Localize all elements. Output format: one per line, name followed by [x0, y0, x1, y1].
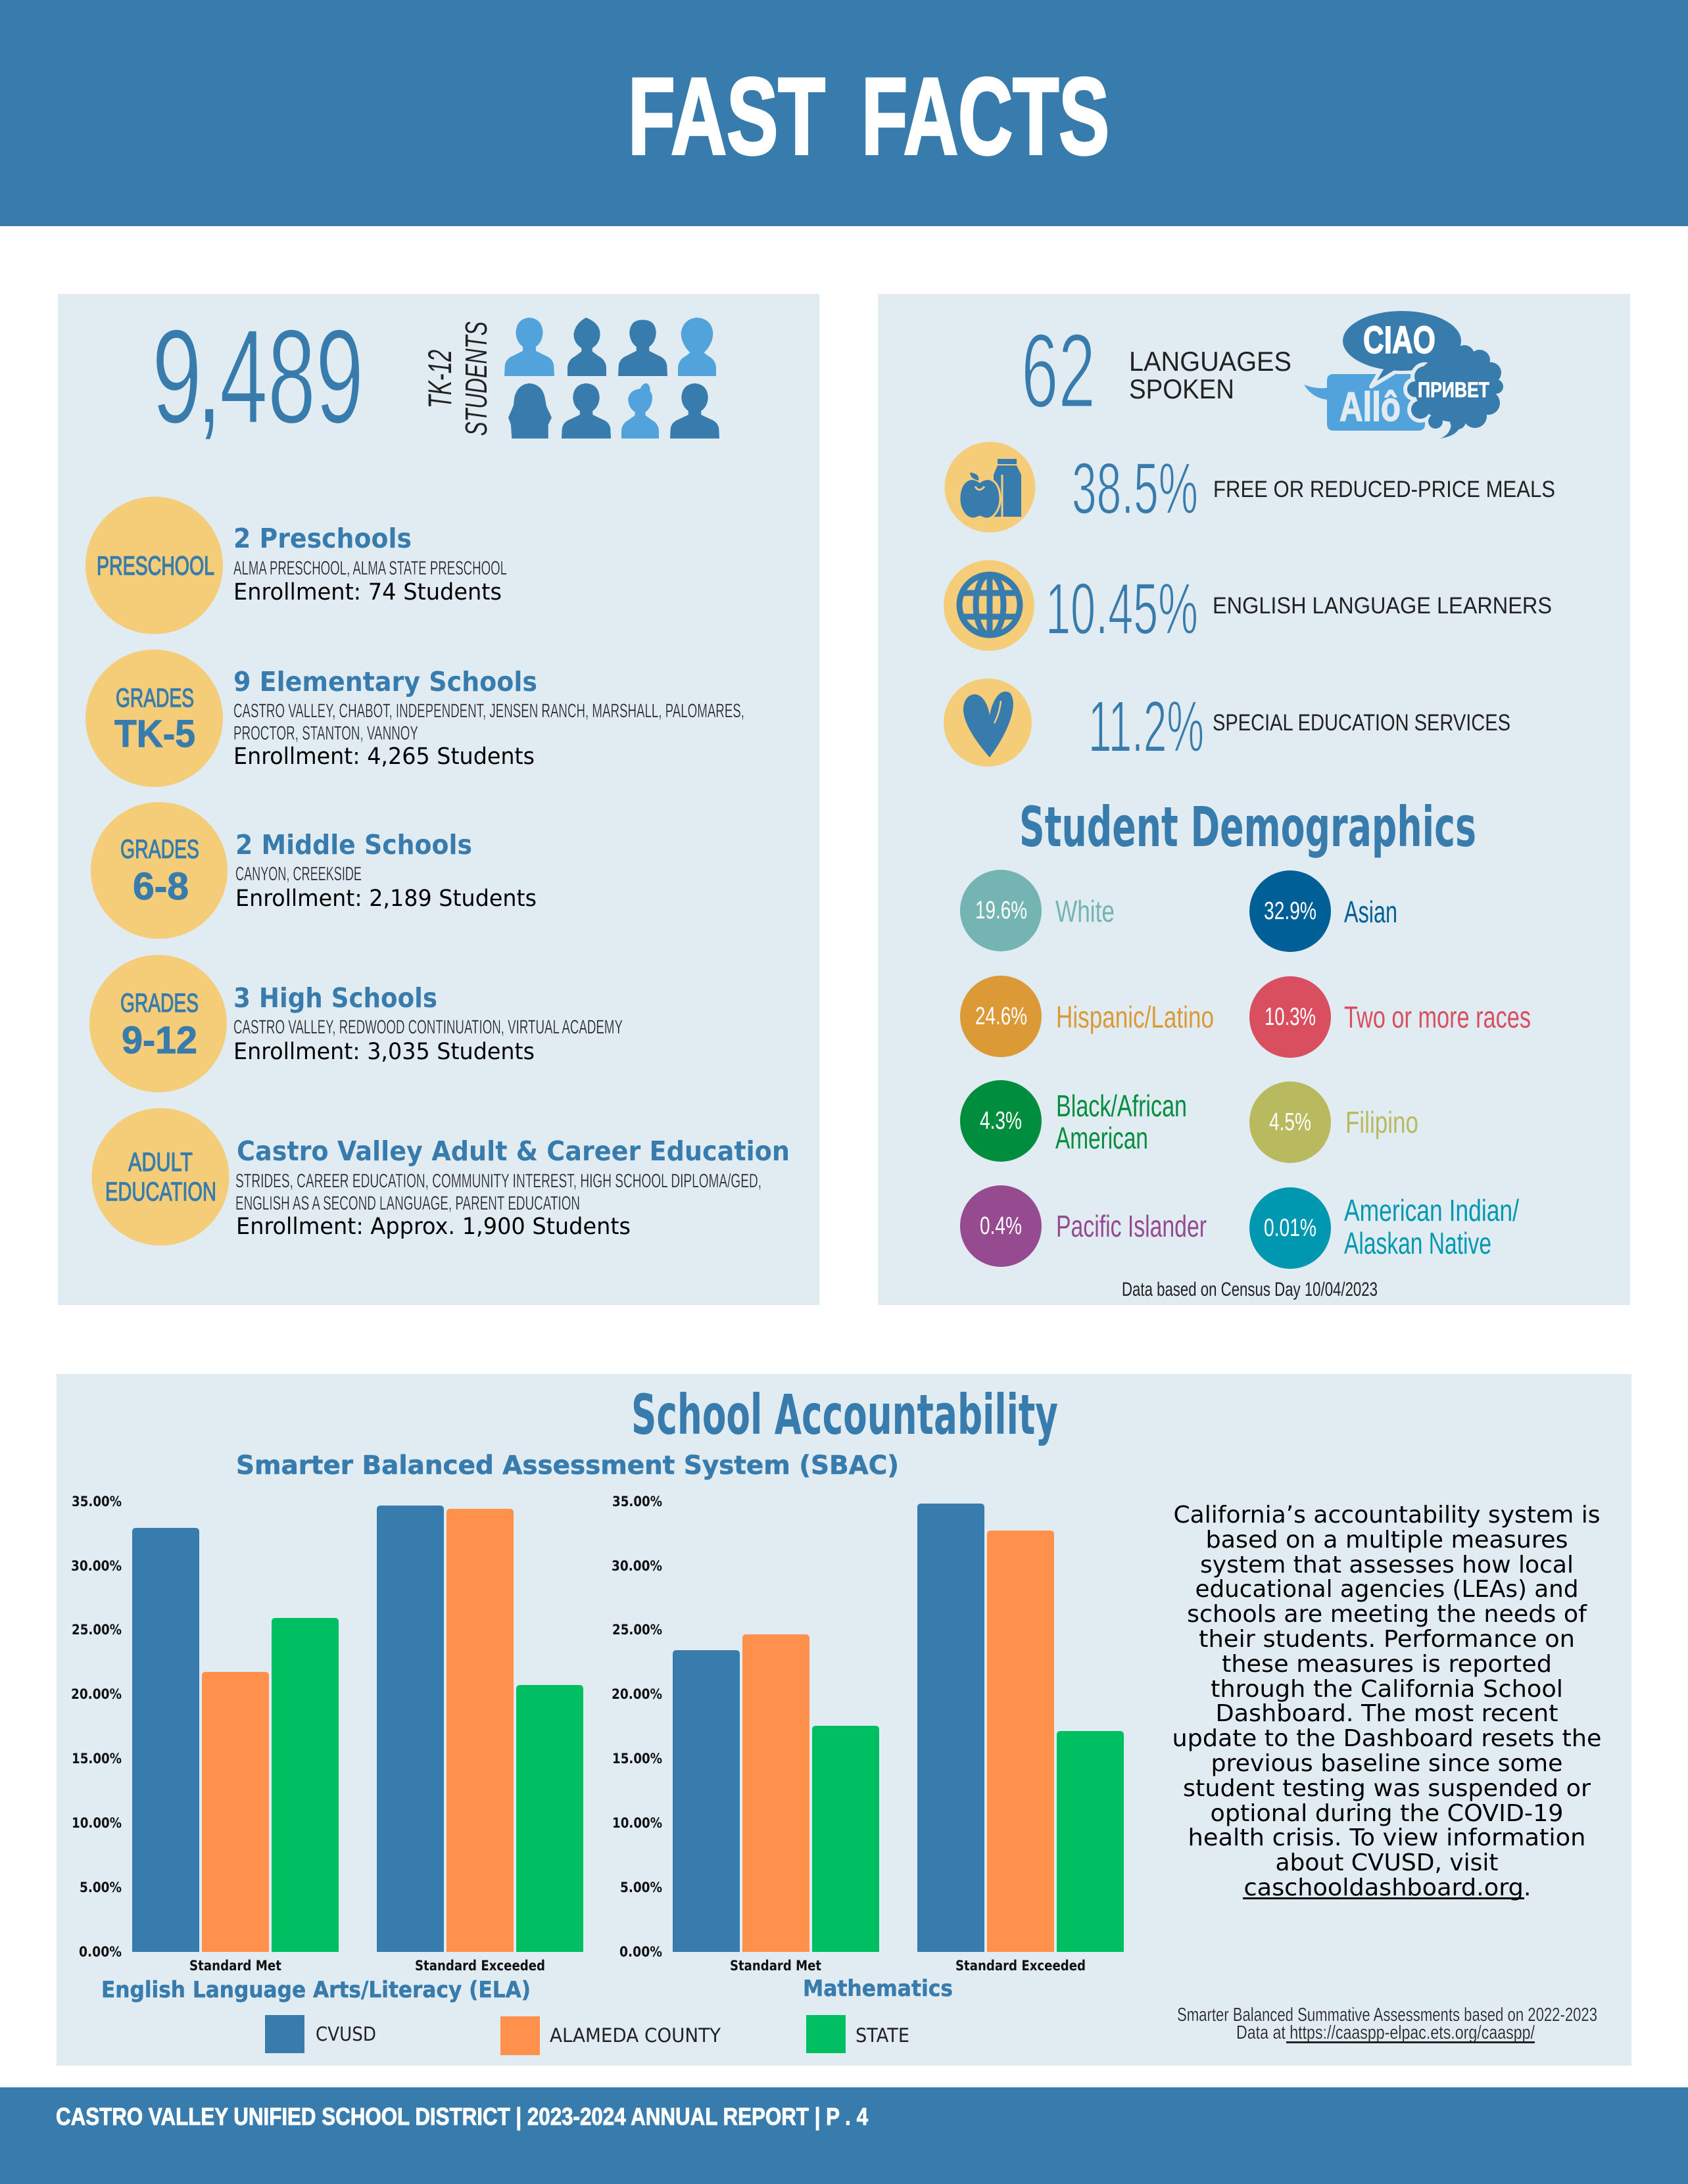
heading: 3 High Schools: 3 High Schools: [233, 982, 437, 1014]
circle: 6-8 badge: 6-8: [133, 865, 189, 908]
value: 38.5%: 38.5%: [1072, 448, 1198, 529]
demographic: pacific islander: Pacific Islander: [1056, 1209, 1207, 1243]
circle: TK-5 badge: GRADES: [116, 684, 194, 713]
enrollment: Enrollment: 2,189 Students: [235, 886, 537, 912]
note: data source: [1177, 2005, 1597, 2043]
icon: speech bubbles: ПРИВЕТ: [1418, 378, 1489, 402]
circle: TK-5 badge: TK-5: [114, 713, 195, 755]
circle: 9-12 badge: GRADES: [120, 989, 199, 1018]
school list: CANYON, CREEKSIDE: [235, 863, 362, 885]
title: FAST FACTS: FACTS: [861, 56, 1109, 178]
y axis labels: 5.00%: [620, 1880, 662, 1895]
y axis labels: 10.00%: [612, 1815, 662, 1831]
y axis labels: 30.00%: [71, 1558, 122, 1574]
label: languages spoken: [1129, 346, 1291, 404]
y axis labels: 5.00%: [80, 1880, 122, 1895]
program list: STRIDES, CAREER EDUCATION, COMMUNITY INTEREST, HIGH SCHOOL DIPLOMA/GED,: [235, 1170, 761, 1192]
stat: special education: [944, 678, 1510, 767]
x axis labels: [189, 1958, 545, 1974]
y axis labels: 15.00%: [72, 1751, 122, 1767]
circle: adult education badge: ADULT: [128, 1148, 193, 1177]
x axis labels: Standard Met: [730, 1958, 821, 1974]
y axis labels: 25.00%: [72, 1622, 122, 1638]
label: TK-12 students: STUDENTS: [459, 321, 493, 436]
text block: accountability explanation: update to the Dashboard resets the: [1172, 1725, 1602, 1752]
row: middle: [91, 802, 537, 939]
row: preschool: [85, 497, 507, 634]
demographic: filipino: [1249, 1081, 1418, 1163]
note: census day: Data based on Census Day 10/04/2023: [1122, 1279, 1378, 1300]
bars: standard met: [132, 1528, 339, 1952]
bar chart: ELA: [71, 1494, 583, 1974]
bars: standard exceeded: [917, 1504, 1124, 1952]
school list: [233, 700, 744, 744]
label: languages spoken: LANGUAGES: [1129, 346, 1291, 377]
enrollment: Enrollment: 4,265 Students: [233, 744, 535, 770]
circle: 6-8 badge: [91, 802, 228, 939]
label: TK-12 students: TK-12: [422, 350, 458, 408]
text block: accountability explanation: California’s accountability system is: [1173, 1502, 1601, 1529]
program list: [235, 1170, 761, 1214]
value: 11.2%: 11.2%: [1088, 686, 1204, 767]
panel: enrollment: [58, 294, 819, 1305]
x axis labels: Standard Exceeded: [955, 1958, 1086, 1974]
chart title: mathematics: Mathematics: [803, 1976, 953, 2002]
header banner: [0, 0, 1688, 226]
circle: preschool badge: [85, 497, 223, 634]
row: adult education: [92, 1108, 790, 1245]
text block: accountability explanation: [1172, 1502, 1602, 1901]
y axis labels: 20.00%: [612, 1686, 662, 1702]
panel: student facts: [878, 294, 1630, 1305]
icon: heart: [944, 678, 1032, 767]
icon: globe: [944, 560, 1034, 651]
legend: [265, 2015, 909, 2055]
y axis labels: [71, 1494, 122, 1960]
text block: accountability explanation: student testing was suspended or: [1183, 1775, 1591, 1802]
title: FAST FACTS: [628, 56, 1109, 178]
legend: CVUSD: [316, 2023, 376, 2045]
demographic: asian: 32.9%: [1264, 897, 1316, 925]
demographic: asian: Asian: [1344, 895, 1397, 929]
text block: accountability explanation: caschooldashboard.org.: [1244, 1874, 1531, 1901]
panel: school accountability: [57, 1374, 1631, 2066]
demographic: american indian: Alaskan Native: [1344, 1226, 1491, 1260]
demographic: white: [960, 870, 1115, 951]
y axis labels: 15.00%: [612, 1751, 662, 1767]
y axis labels: 20.00%: [71, 1686, 122, 1702]
legend: STATE: [856, 2024, 909, 2047]
text block: accountability explanation: about CVUSD, visit: [1276, 1849, 1498, 1876]
big number: total students: 9: [152, 302, 202, 452]
y axis labels: 35.00%: [612, 1494, 662, 1509]
row: elementary: [85, 650, 744, 787]
enrollment: Enrollment: 74 Students: [233, 579, 502, 605]
circle: adult education badge: [92, 1108, 229, 1245]
heading: Castro Valley Adult & Career Education: Castro Valley Adult & Career Education: [237, 1135, 790, 1167]
demographic: black: American: [1055, 1121, 1148, 1155]
heading: 2 Middle Schools: 2 Middle Schools: [235, 829, 472, 861]
label: ENGLISH LANGUAGE LEARNERS: [1213, 593, 1552, 619]
big number: total students: ,: [196, 302, 222, 452]
school list: CASTRO VALLEY, REDWOOD CONTINUATION, VIRTUAL ACADEMY: [233, 1016, 623, 1038]
label: SPECIAL EDUCATION SERVICES: [1213, 710, 1510, 736]
demographic: hispanic: [960, 976, 1214, 1057]
demographic: pacific islander: 0.4%: [980, 1212, 1022, 1240]
demographic: hispanic: 24.6%: [975, 1003, 1027, 1030]
circle: preschool badge: PRESCHOOL: [97, 552, 214, 581]
title: FAST FACTS: FAST: [628, 56, 825, 178]
school list: PROCTOR, STANTON, VANNOY: [233, 723, 418, 744]
enrollment: Enrollment: 3,035 Students: [233, 1039, 535, 1065]
circle: 6-8 badge: GRADES: [120, 835, 199, 864]
text block: accountability explanation: their students. Performance on: [1199, 1626, 1575, 1653]
icon: speech bubbles: CIAO: [1363, 319, 1435, 362]
demographic: filipino: 4.5%: [1269, 1108, 1311, 1136]
heading: 9 Elementary Schools: 9 Elementary Schools: [233, 666, 537, 698]
big number: total students: [152, 302, 364, 452]
icon: speech bubbles: Allô: [1339, 385, 1401, 430]
big number: languages: 62: [1021, 312, 1096, 429]
y axis labels: 0.00%: [619, 1944, 662, 1960]
demographic: hispanic: Hispanic/Latino: [1056, 1000, 1214, 1034]
school list: CASTRO VALLEY, CHABOT, INDEPENDENT, JENSEN RANCH, MARSHALL, PALOMARES,: [233, 700, 744, 722]
icon: speech bubbles: [1304, 311, 1503, 439]
value: 10.45%: 10.45%: [1046, 569, 1198, 650]
circle: 9-12 badge: 9-12: [122, 1019, 197, 1062]
chart title: ELA: English Language Arts/Literacy (ELA): [101, 1977, 531, 2003]
demographic: pacific islander: [960, 1185, 1207, 1267]
y axis labels: 10.00%: [72, 1815, 122, 1831]
stat: free or reduced meals: [944, 442, 1555, 533]
y axis labels: [612, 1494, 662, 1960]
label: TK-12 students: [422, 321, 493, 436]
y axis labels: 35.00%: [72, 1494, 122, 1509]
stat: english learners: [944, 560, 1552, 651]
demographic: white: 19.6%: [975, 897, 1027, 924]
subheading: SBAC: Smarter Balanced Assessment System (SBAC): [236, 1451, 899, 1481]
text block: accountability explanation: these measures is reported: [1222, 1651, 1552, 1678]
demographic: american indian: 0.01%: [1264, 1214, 1316, 1242]
y axis labels: 0.00%: [79, 1944, 122, 1960]
icon: apple and milk: [944, 442, 1035, 533]
demographic: white: White: [1055, 894, 1115, 928]
program list: ENGLISH AS A SECOND LANGUAGE, PARENT EDUCATION: [235, 1193, 580, 1214]
legend: ALAMEDA COUNTY: [550, 2024, 721, 2047]
text block: accountability explanation: Dashboard. The most recent: [1215, 1700, 1558, 1727]
bar chart: mathematics: [612, 1494, 1124, 1974]
bars: standard met: [673, 1634, 879, 1952]
footer banner: [0, 2087, 1688, 2184]
circle: adult education badge: EDUCATION: [105, 1177, 216, 1206]
demographic: two or more: Two or more races: [1344, 1000, 1531, 1034]
label: languages spoken: SPOKEN: [1129, 373, 1234, 404]
demographic: two or more: [1249, 976, 1531, 1058]
text block: accountability explanation: through the California School: [1211, 1676, 1563, 1703]
text block: accountability explanation: schools are meeting the needs of: [1187, 1601, 1587, 1628]
circle: 9-12 badge: [89, 955, 227, 1093]
row: high: [89, 955, 623, 1093]
bars: standard exceeded: [377, 1506, 583, 1952]
y axis labels: 25.00%: [612, 1622, 662, 1638]
big number: total students: 489: [220, 302, 364, 452]
demographic: american indian: American Indian/: [1344, 1193, 1519, 1227]
x axis labels: Standard Met: [189, 1958, 281, 1974]
text block: accountability explanation: optional during the COVID-19: [1210, 1800, 1564, 1827]
footer text: CASTRO VALLEY UNIFIED SCHOOL DISTRICT | 2023-2024 ANNUAL REPORT | P . 4: [56, 2103, 868, 2131]
note: data source: Data at https://caaspp-elpac.ets.org/caaspp/: [1236, 2022, 1535, 2043]
heading: 2 Preschools: 2 Preschools: [233, 523, 412, 554]
school list: ALMA PRESCHOOL, ALMA STATE PRESCHOOL: [233, 558, 507, 579]
text block: accountability explanation: health crisis. To view information: [1188, 1824, 1586, 1851]
icon: student silhouettes: [504, 318, 719, 439]
enrollment: Enrollment: Approx. 1,900 Students: [236, 1214, 631, 1240]
text block: accountability explanation: based on a multiple measures: [1206, 1527, 1568, 1554]
demographic: filipino: Filipino: [1345, 1105, 1418, 1139]
y axis labels: 30.00%: [612, 1558, 662, 1574]
demographic: black: Black/African: [1056, 1089, 1187, 1123]
x axis labels: Standard Exceeded: [415, 1958, 545, 1974]
demographic: asian: [1249, 870, 1397, 952]
demographic: black: 4.3%: [980, 1107, 1022, 1135]
text block: accountability explanation: previous baseline since some: [1211, 1750, 1562, 1777]
heading: school accountability: School Accountability: [631, 1383, 1058, 1447]
demographic: american indian: [1249, 1187, 1519, 1269]
demographic: two or more: 10.3%: [1265, 1003, 1316, 1031]
circle: TK-5 badge: [85, 650, 223, 787]
demographic: black: [960, 1080, 1187, 1162]
text block: accountability explanation: educational agencies (LEAs) and: [1195, 1576, 1578, 1603]
text block: accountability explanation: system that assesses how local: [1200, 1552, 1574, 1579]
label: FREE OR REDUCED-PRICE MEALS: [1213, 477, 1555, 502]
x axis labels: [730, 1958, 1086, 1974]
